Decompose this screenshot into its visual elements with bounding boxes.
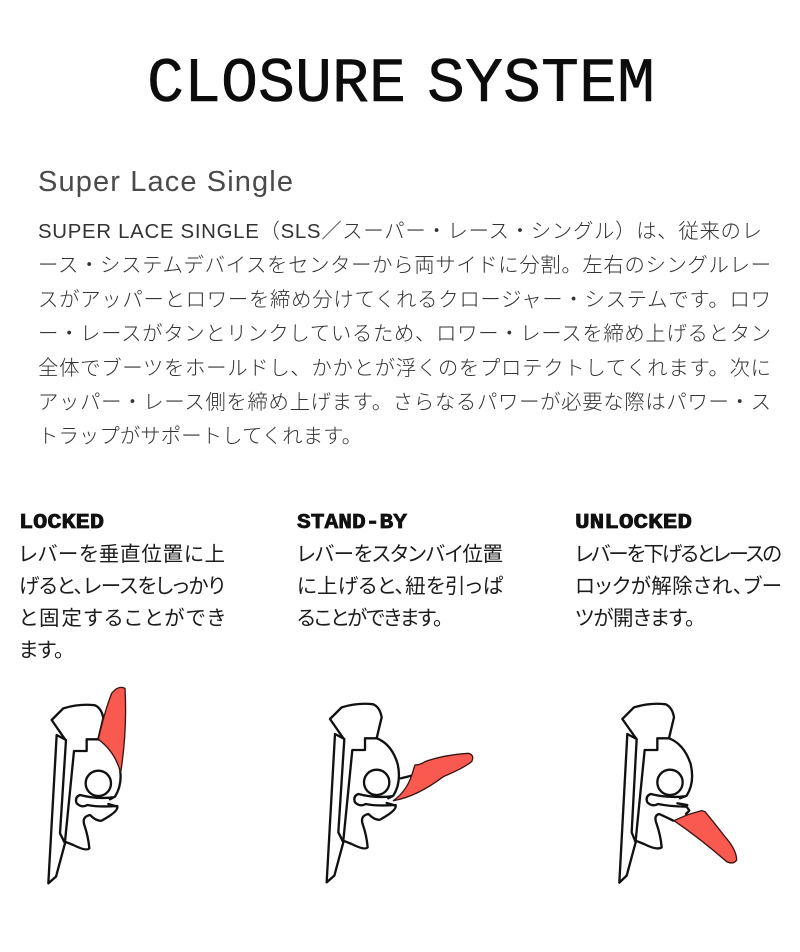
icon: unlocked lever bbox=[619, 704, 737, 883]
stand-by heading: STAND-BY bbox=[297, 512, 407, 535]
description text block bbox=[38, 220, 771, 448]
stand-by description: レバーをスタンバイ位置 bbox=[297, 543, 503, 566]
subtitle: Super Lace Single bbox=[38, 166, 293, 198]
stand-by description: ることができます。 bbox=[297, 607, 443, 630]
description text block: トラップがサポートしてくれます。 bbox=[38, 425, 362, 448]
icon: stand-by lever bbox=[327, 704, 473, 882]
icon: locked lever bbox=[48, 687, 126, 883]
locked description bbox=[19, 543, 225, 662]
description text block: ー・レースがタンとリンクしているため、ロワー・レースを締め上げるとタン bbox=[38, 322, 771, 346]
description text block: アッパー・レース側を締め上げます。さらなるパワーが必要な際はパワー・ス bbox=[38, 391, 771, 414]
locked description: と固定することができ bbox=[19, 607, 225, 630]
title: CLOSURE bbox=[147, 49, 406, 120]
locked heading: LOCKED bbox=[19, 512, 104, 535]
stand-by description bbox=[297, 543, 503, 630]
unlocked description: ロックが解除され、ブー bbox=[575, 574, 782, 598]
description text block: 全体でブーツをホールドし、かかとが浮くのをプロテクトしてくれます。次に bbox=[38, 357, 771, 380]
unlocked description: レバーを下げるとレースの bbox=[575, 543, 782, 566]
stand-by description: に上げると、紐を引っぱ bbox=[297, 575, 503, 598]
panel: locked bbox=[19, 512, 225, 883]
unlocked heading: UNLOCKED bbox=[575, 512, 692, 535]
panel: stand-by bbox=[297, 512, 503, 882]
locked description: レバーを垂直位置に上 bbox=[19, 543, 225, 566]
panel: unlocked bbox=[575, 512, 782, 883]
locked description: ます。 bbox=[19, 639, 64, 662]
title: SYSTEM bbox=[427, 49, 655, 120]
description text block: SUPER LACE SINGLE（SLS／スーパー・レース・シングル）は、従来のレ bbox=[38, 220, 762, 243]
description text block: スがアッパーとロワーを締め分けてくれるクロージャー・システムです。ロワ bbox=[38, 288, 771, 312]
description text block: ース・システムデバイスをセンターから両サイドに分割。左右のシングルレー bbox=[38, 254, 771, 277]
unlocked description bbox=[575, 543, 782, 630]
title bbox=[147, 49, 655, 120]
unlocked description: ツが開きます。 bbox=[575, 607, 695, 630]
locked description: げると、レースをしっかり bbox=[19, 575, 225, 598]
